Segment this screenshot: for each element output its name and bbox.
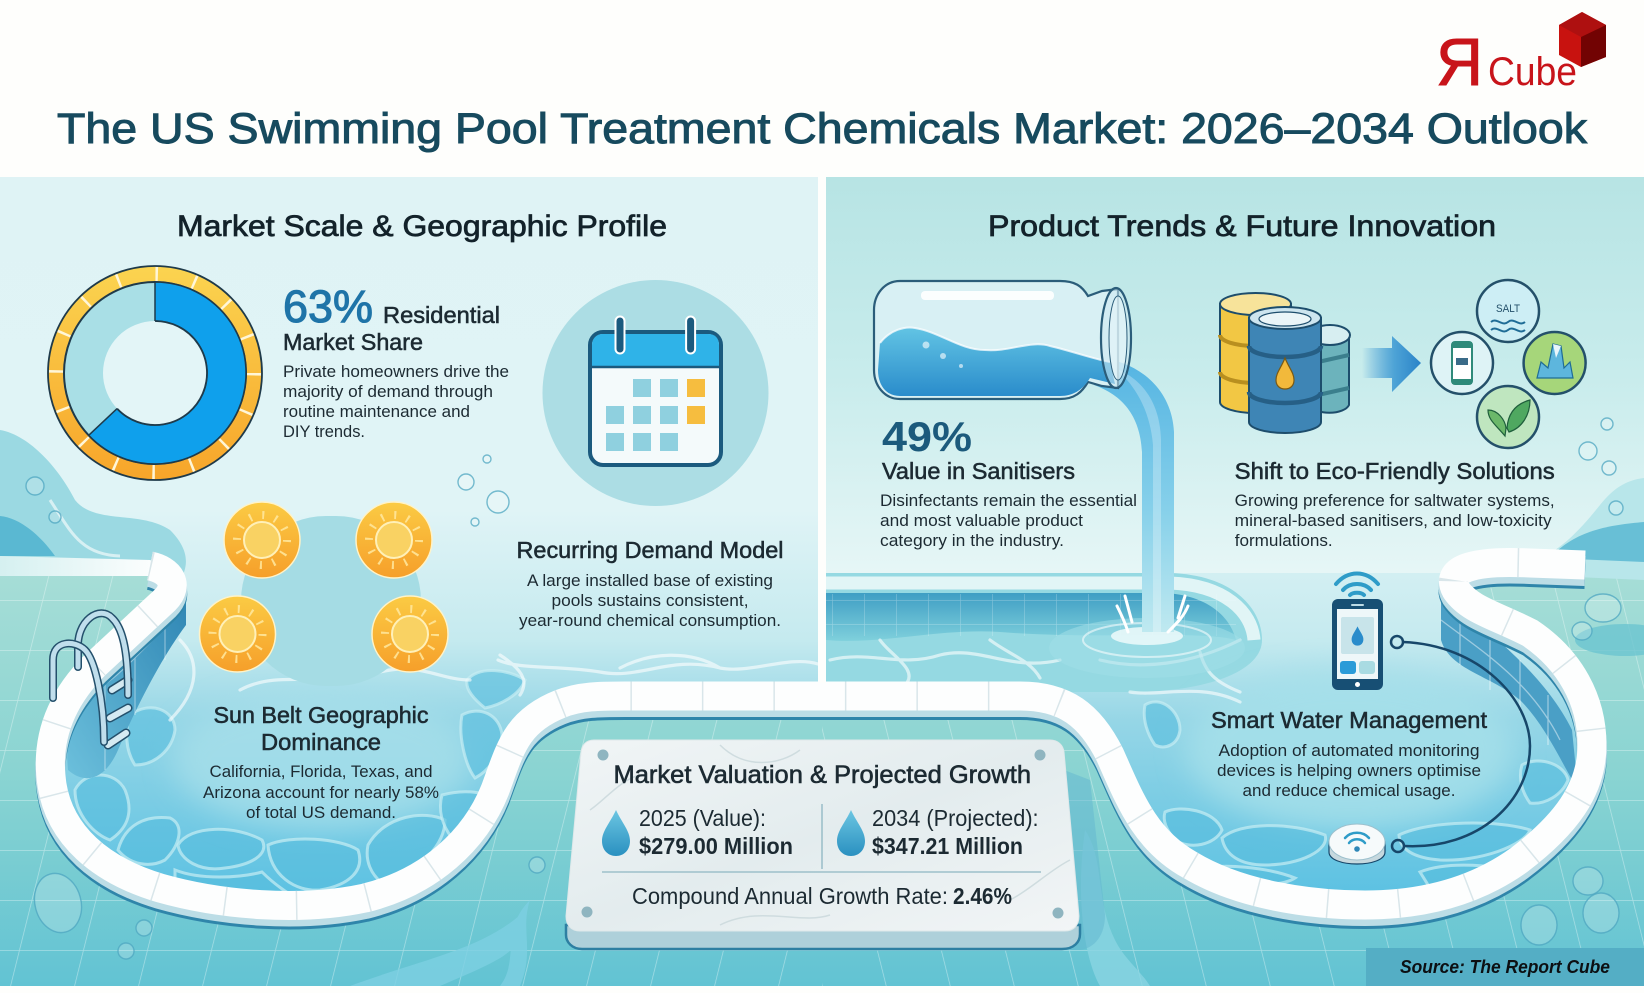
- stat: sanitisers: and most valuable product: [880, 511, 1083, 530]
- bottom white strip: [0, 986, 1644, 993]
- value 2025: [639, 805, 793, 859]
- text: sun belt: California, Florida, Texas, and: [210, 762, 432, 781]
- text: sun belt: Dominance: [261, 729, 381, 755]
- icon: leaf: [1477, 386, 1539, 448]
- white divider between panels: [818, 177, 826, 683]
- decorative bubbles and water drops: [26, 418, 1623, 986]
- text: smart water: Adoption of automated monitoring: [1218, 741, 1480, 760]
- text: eco-friendly shift: Growing preference for saltwater systems,: [1235, 491, 1555, 510]
- arrow: [1362, 336, 1421, 392]
- title: The US Swimming Pool Treatment Chemicals Market: 2026–2034 Outlook: [57, 105, 1588, 153]
- drop icon: 2034: [837, 810, 865, 856]
- heading: product trends: Product Trends & Future Innovation: [988, 210, 1496, 243]
- icon: salt water: SALT: [1496, 303, 1520, 315]
- value 2034: [872, 805, 1039, 859]
- water light pattern: right pool: [1130, 652, 1568, 889]
- text: recurring demand: pools sustains consistent,: [552, 591, 748, 610]
- text: eco-friendly shift: mineral-based sanitisers, and low-toxicity: [1235, 511, 1552, 530]
- background: pool water and left panel: [0, 177, 1644, 905]
- stat: sanitisers: category in the industry.: [880, 531, 1064, 550]
- text: smart water: [1211, 707, 1488, 800]
- icon: bottle: [874, 281, 1131, 399]
- sub-pool below right panel: [826, 573, 1262, 692]
- value 2034: 2034 (Projected):: [872, 805, 1039, 831]
- text: recurring demand: Recurring Demand Model: [516, 537, 784, 563]
- text: smart water: devices is helping owners optimise: [1217, 761, 1481, 780]
- text: eco-friendly shift: formulations.: [1235, 531, 1333, 550]
- text: smart water: Smart Water Management: [1211, 707, 1488, 733]
- logo: RCube: Я: [1436, 25, 1483, 100]
- cagr line: 2.46%: [953, 883, 1012, 909]
- icon: mineral crystal: [1524, 332, 1586, 394]
- text: sun belt: [203, 702, 439, 822]
- left wave: [0, 430, 186, 576]
- stat: residential share: Market Share: [283, 329, 423, 355]
- stat: residential share: DIY trends.: [283, 422, 365, 441]
- panel: right background: [826, 177, 1644, 573]
- icon: smartphone: [1332, 599, 1383, 690]
- stat: residential share: routine maintenance and: [283, 402, 470, 421]
- cagr line: Compound Annual Growth Rate:: [632, 883, 948, 909]
- icon: four suns: [200, 502, 448, 686]
- right pool wall: [1441, 590, 1578, 790]
- icon: filter cartridge: [1431, 332, 1493, 394]
- stat: sanitisers: Value in Sanitisers: [882, 458, 1075, 484]
- text: eco-friendly shift: [1235, 458, 1555, 550]
- left pool wall: [67, 592, 186, 778]
- pool ladder: [53, 613, 128, 745]
- icon: chemical barrels: [1220, 293, 1350, 433]
- stat: residential share: majority of demand through: [283, 382, 493, 401]
- heading: market scale: Market Scale & Geographic Profile: [177, 210, 667, 243]
- icon: wifi above phone: [1336, 574, 1378, 595]
- pool coping: [50, 562, 1592, 914]
- logo: RCube: [1436, 12, 1606, 100]
- text: sun belt: of total US demand.: [246, 803, 396, 822]
- right wave: [1530, 478, 1644, 580]
- stat: residential share: [283, 281, 509, 441]
- connector line: phone to sensor: [1391, 636, 1530, 852]
- icon: calendar: [542, 280, 768, 506]
- donut chart: 63% residential: [48, 266, 262, 480]
- panel: market valuation plaque: [566, 740, 1105, 950]
- water stream and ripple: [1049, 358, 1245, 678]
- text: recurring demand: [516, 537, 784, 630]
- stat: residential share: Private homeowners drive the: [283, 362, 509, 381]
- drop icon: 2025: [602, 810, 630, 856]
- text: sun belt: Arizona account for nearly 58%: [203, 783, 439, 802]
- text: eco-friendly shift: Shift to Eco-Friendly Solutions: [1235, 458, 1555, 484]
- plaque heading: Market Valuation & Projected Growth: [614, 761, 1031, 789]
- icon: salt water: [1477, 280, 1539, 342]
- background: pool deck tiles: [0, 560, 1644, 986]
- value 2025: $279.00 Million: [639, 833, 793, 859]
- text: recurring demand: A large installed base of existing: [527, 571, 773, 590]
- source box: Source: The Report Cube: [1400, 957, 1610, 977]
- text: recurring demand: year-round chemical consumption.: [519, 611, 781, 630]
- text: smart water: and reduce chemical usage.: [1242, 781, 1456, 800]
- text: sun belt: Sun Belt Geographic: [214, 702, 428, 728]
- value 2034: $347.21 Million: [872, 833, 1023, 859]
- stat: residential share: Residential: [383, 302, 500, 328]
- water light pattern: left pool: [75, 640, 818, 900]
- stat: sanitisers: Disinfectants remain the essential: [880, 491, 1137, 510]
- stat: sanitisers: 49%: [882, 413, 972, 460]
- stat: sanitisers: [880, 413, 1137, 550]
- icon: water sensor: [1329, 824, 1385, 864]
- logo: RCube: Cube: [1488, 50, 1577, 94]
- value 2025: 2025 (Value):: [639, 805, 766, 831]
- source box: [1366, 948, 1644, 986]
- stat: residential share: 63%: [283, 281, 373, 332]
